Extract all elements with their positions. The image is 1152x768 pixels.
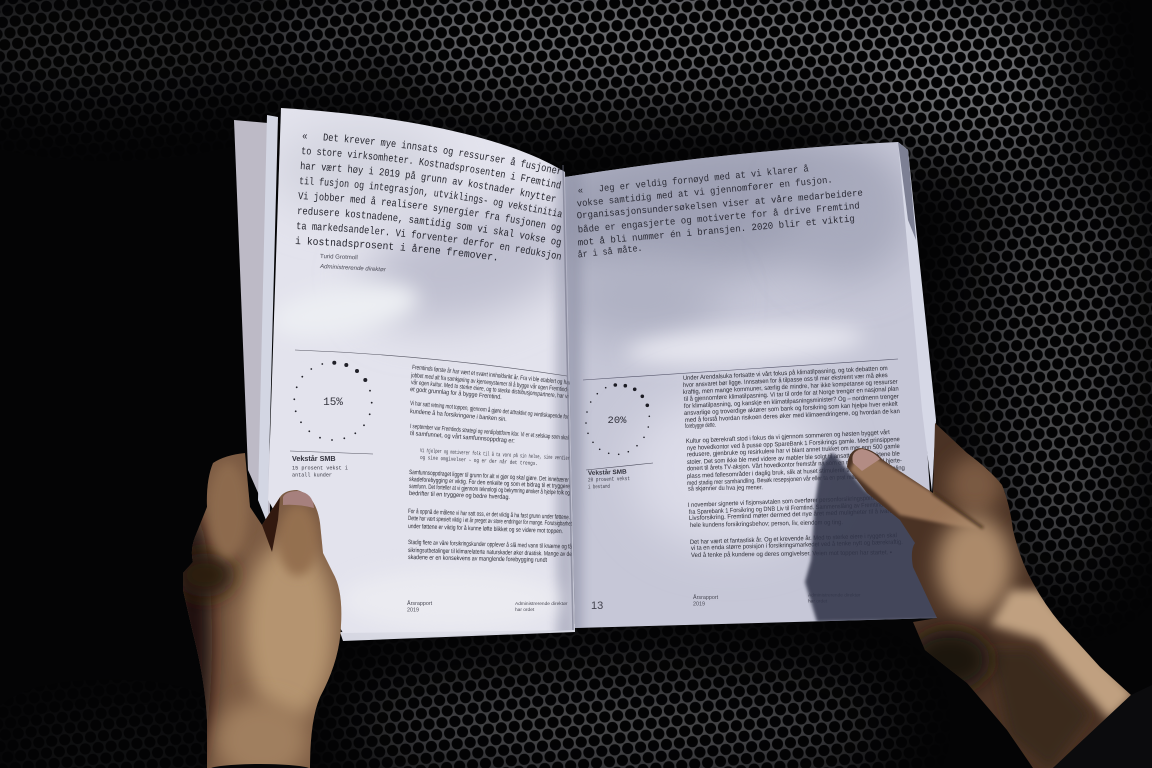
left page body text: til samfunnet, og vårt samfunnsoppdrag er:	[410, 429, 515, 445]
right page body text	[683, 364, 905, 559]
right page body text: hele kundens forsikringsbehov; person, liv, eiendom og ting.	[690, 519, 843, 529]
left page quote: har vært høy i 2019 på grunn av kostnader knytter	[300, 162, 556, 202]
right page	[565, 142, 937, 628]
quote signature: Turid Grotmoll	[320, 254, 358, 261]
left page body text: Dette har vært spesielt viktig i et år preget av store endringer for mange. Forutsigbarhet	[408, 514, 572, 528]
left page body text: kundene å ha forsikringene i banken sin.	[410, 407, 507, 423]
left page body text: For å oppnå de målene vi har satt oss, er det viktig å ha fast grunn under føttene.	[408, 507, 570, 521]
left page quote: Vi jobber med å realisere synergier fra fusjonen og	[298, 192, 561, 234]
chart caption: Vekstår SMB: 15 prosent vekst i	[292, 464, 349, 472]
right page body text: hvor ansvaret bør ligge. Innsatsen for å tilpasse oss til mer ekstremt vær må økes	[683, 371, 888, 389]
right page quote: år i så måte.	[577, 243, 643, 260]
left page body text: og sine omgivelser – og er der når det trengs.	[420, 454, 538, 467]
thumbnail	[283, 491, 314, 508]
left page body text: jobbet med alt fra samkjøring av kjernesystemer til å bygge vår egen Fremtind-	[410, 371, 569, 394]
right page body text: Livsforsikring. Fremtind møter dermed det nye året med muligheter til å ivareta	[689, 507, 898, 522]
right page lighting	[565, 143, 908, 628]
left page footer	[407, 600, 568, 614]
right page footer: Administrerende direktør	[808, 592, 861, 598]
left page body text: Samfunnsoppdraget ligger til grunn for alt vi gjør og skal gjøre. Det innebærer	[409, 469, 569, 484]
left page footer: Administrerende direktør	[515, 601, 568, 607]
left page footer: 2019	[407, 608, 419, 614]
left page body text: skadene er en konsekvens av manglende forebygging rundt	[408, 554, 547, 564]
left page body text: Stadig flere av våre forsikringskunder opplever å slå med vann til knærne og få	[408, 538, 572, 551]
left page quote: redusere kostnadene, samtidig som vi skal vokse og	[298, 207, 562, 248]
right page body text: kraftig, men mange kommuner, særlig de mindre, har ikke kompetanse og ressurser	[683, 379, 898, 396]
chart caption: Vekstår SMB: antall kunder	[292, 472, 332, 478]
right page quote	[576, 163, 864, 260]
right page quote: mot å bli nummer én i bransjen. 2020 blir et viktig	[577, 213, 855, 248]
left page quote: ta markedsandeler. Vi forventer derfor en reduksjon	[297, 222, 561, 260]
left page footer: har ordet	[515, 607, 535, 613]
thumbnail	[852, 449, 880, 471]
left page body text: bedrifter til en tryggere og bedre hverdag.	[409, 490, 510, 501]
quote signature: Administrerende direktør	[319, 264, 387, 273]
left page footer: Årsrapport	[407, 600, 433, 607]
spine shadow	[563, 165, 573, 630]
right page body text: stoler. Det som ikke ble med videre av møbler ble solgt til ansatte, og inntektene ble	[687, 450, 900, 466]
left page body text: Fremtinds første år har vært et svært innholdsrikt år. Fra vi ble etablert og har	[412, 363, 571, 387]
chart: 20 percent dot ring: 20%	[608, 415, 627, 427]
left page quote: i kostnadsprosent i årene fremover.	[296, 236, 496, 260]
right page body text: vi ta en enda større posisjon i forsikringsmarkedet ved å tenke nytt og bærekraftig.	[691, 538, 903, 552]
right page body text: Ved å tenke på kundene og deres omgivelser. Veien mot toppen har startet. ▪	[691, 548, 892, 559]
right page quote: vokse samtidig med at vi gjennomfører en fusjon.	[576, 174, 833, 209]
right page body text: så skjønner du hva jeg mener.	[688, 483, 763, 492]
right page footer: 2019	[693, 602, 705, 608]
right page quote: « Jeg er veldig fornøyd med at vi klarer å	[577, 163, 809, 196]
right hand	[847, 423, 1152, 768]
right page footer: Årsrapport	[693, 594, 719, 601]
left hand	[172, 453, 341, 768]
right page body text: for klimatilpasning, og kanskje en klimatilpasningsminister? Og – nordmenn trenger	[684, 393, 899, 410]
right page edge strip	[898, 142, 936, 492]
left page quote: to store virksomheter. Kostnadsprosenten i Fremtind	[302, 147, 562, 189]
chart caption: Vekstår SMB: Vekstår SMB	[588, 468, 627, 477]
left page body text: Vi har satt retning mot toppen, gjennom å gjøre det attraktivt og verdiskapende for	[410, 399, 569, 421]
chart caption: Vekstår SMB: Vekstår SMB	[292, 454, 336, 463]
page number: 13	[591, 600, 603, 612]
right page body text: Under Arendalsuka fortsatte vi vårt fokus på klimatilpasning, og tok debatten om	[683, 364, 888, 382]
left page body text	[408, 363, 572, 564]
right page body text: Det har vært et fantastisk år. Og et krevende år. Med to sterke eiere i ryggen skal	[690, 531, 897, 546]
right page body text: med å forstå hvordan risikoen deres øker med klimaendringene, og hvordan de kan	[685, 407, 900, 424]
left page quote: til fusjon og integrasjon, utviklings- og vekstinitia	[300, 176, 562, 218]
right page body text: nye hovedkontor ved å pusse opp SpareBank 1 Forsikrings gamle. Med prinsippene	[687, 435, 900, 452]
right page quote: Organisasjonsundersøkelsen viser at våre medarbeidere	[576, 187, 864, 221]
left page body text: vår egen kultur. Med to sterke eiere, og to sterke distribusjonspartnere, har vi	[411, 378, 569, 400]
left page body text: Vi hjelper og motiverer folk til å ta vare på sin helse, sine verdier	[420, 447, 570, 462]
back sheet of booklet	[234, 115, 575, 641]
left page body text: samfunn. Det forteller at vi gjennom teknologi og bekymring ønsker å hjelpe folk og	[409, 482, 570, 497]
right page body text: fra Sparebank 1 Forsikring og DNB Liv til Fremtind. Sammenslåing av Fremtind og	[689, 500, 891, 516]
left page body text: under føttene er viktig for å kunne løfte blikket og se videre mot toppen.	[408, 522, 563, 535]
quote signature	[319, 254, 387, 273]
left page body text: skadeforebygging er viktig. For den enkelte og som et bidrag til et tryggere	[409, 476, 570, 490]
chart caption: Vekstår SMB	[586, 463, 653, 490]
right page body text: forebygge dette.	[685, 422, 716, 430]
chart caption: Vekstår SMB	[290, 451, 373, 478]
right page body text: ansvarlige og troverdige aktører som bank og forsikring som kan hjelpe hver enkelt	[684, 401, 898, 417]
left page	[268, 108, 575, 633]
chart: 15 percent dot ring: 15%	[323, 397, 343, 409]
right page body text: donert til årets TV-aksjon. Vårt hovedkontor fremstår nå som en møteplass med hjerte-	[687, 456, 902, 472]
left page body text: sikringsutbetalinger til klimarelaterte naturskader øker drastisk. Mange av de	[408, 547, 572, 558]
right page quote: både er engasjerte og motiverte for å drive Fremtind	[577, 200, 860, 235]
chart: 20 percent dot ring	[585, 383, 650, 455]
chart caption: Vekstår SMB: 20 prosent vekst	[588, 475, 630, 483]
right page body text: plass med fellesområder i daglig bruk, slik at huset stimulerer til samarbeid og deling	[687, 464, 905, 480]
left page quote	[296, 134, 562, 260]
right page body text: redusere, gjenbruke og resirkulere har vi blant annet trukket om mer enn 500 gamle	[687, 443, 900, 458]
chart caption: Vekstår SMB: i bestand	[588, 483, 610, 490]
right page body text: til å gjennomføre klimatilpasning. Vi tar til orde for at Norge trenger en nasjonal plan	[684, 384, 899, 403]
right page body text: I november signerte vi fisjonsavtalen som overfører personforsikringsporteføljen	[688, 494, 890, 509]
left page lighting	[267, 125, 590, 640]
right page footer	[693, 592, 861, 608]
left page body text: et godt grunnlag for å bygge Fremtind.	[410, 385, 502, 401]
chart: 15 percent dot ring	[293, 361, 373, 441]
right page body text: med stadig mer samhandling. Besøk resepsjonen vår eller ta en prat med oss	[687, 472, 867, 487]
right page footer: har ordet	[808, 598, 828, 604]
left page body text: I september var Fremtinds strategi og verdiplattform klar. Vi er et selskap som skal	[410, 423, 569, 442]
sleeve cuff	[208, 764, 312, 768]
left page quote: « Det krever mye innsats og ressurser å fusjoner	[302, 134, 562, 174]
sleeve	[1053, 685, 1152, 768]
thumb shadow on right page	[805, 453, 940, 622]
right page body text: Kultur og bærekraft stod i fokus da vi gjennom sommeren og høsten bygget vårt	[686, 428, 890, 445]
